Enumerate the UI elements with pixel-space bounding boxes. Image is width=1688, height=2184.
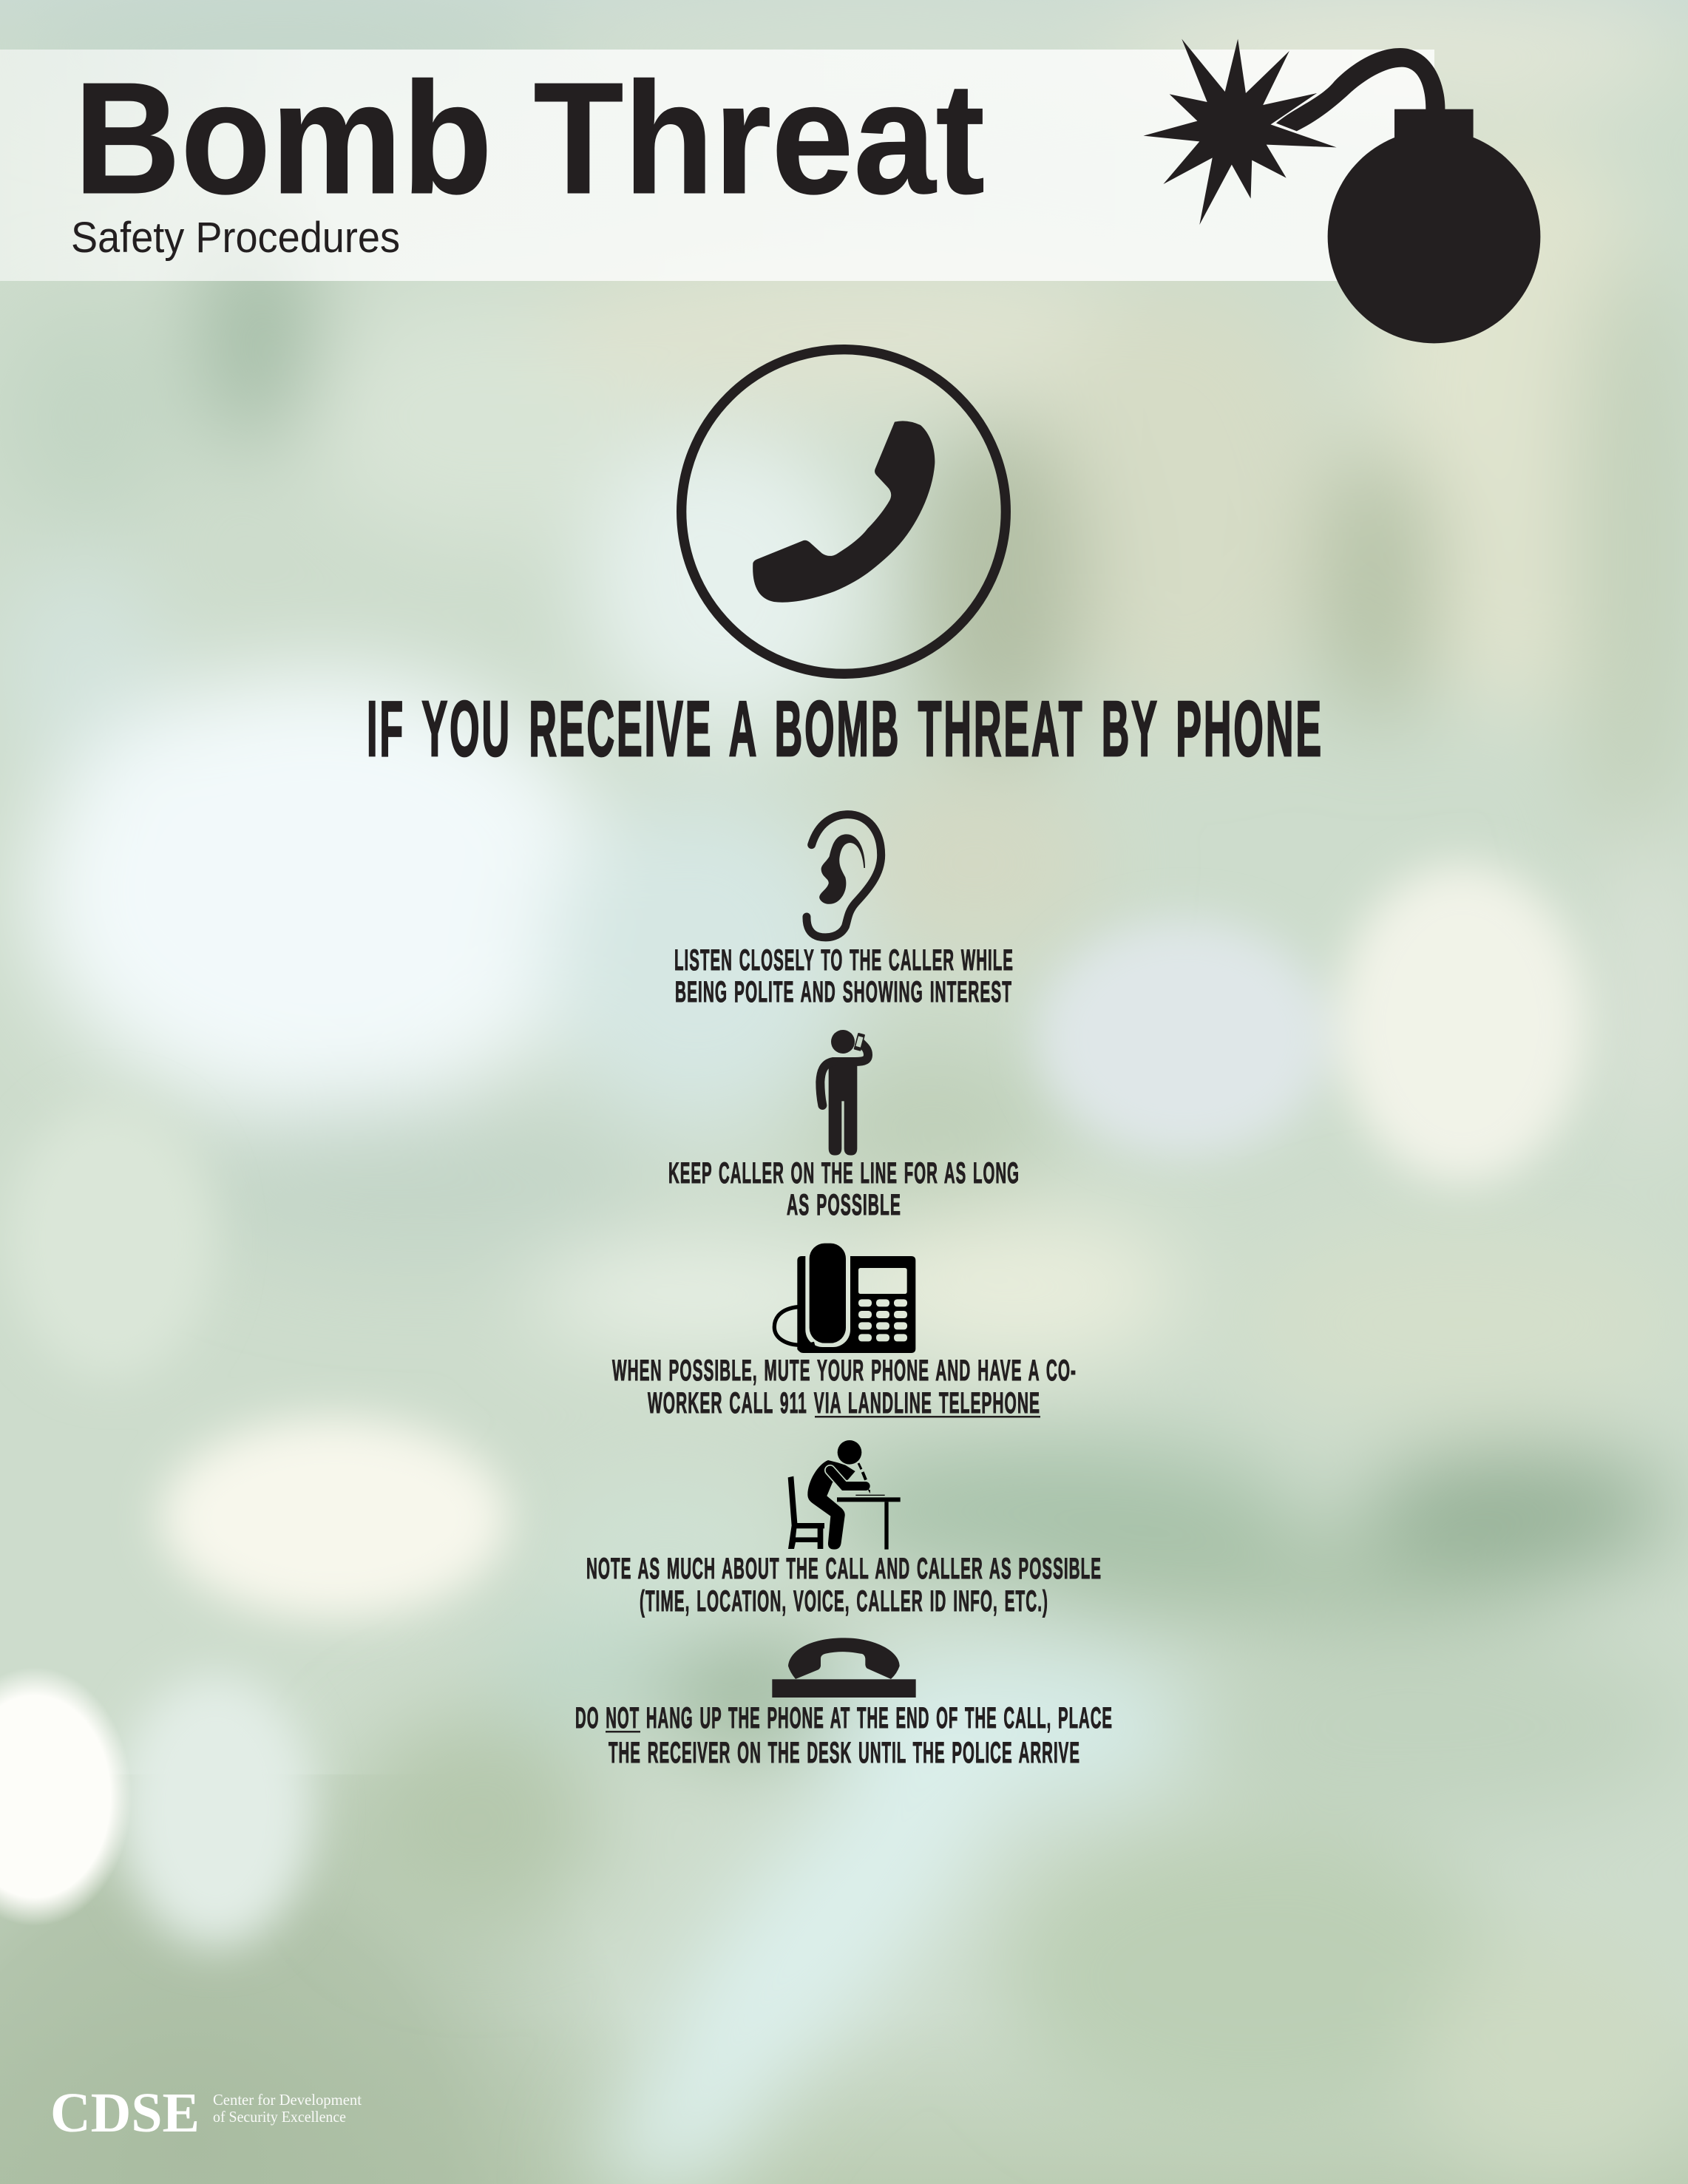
step 4: take notes <box>586 1440 1102 1618</box>
icon: handset on desk <box>772 1638 916 1698</box>
logo tagline: Center for Development <box>213 2091 362 2109</box>
step 5 text: DO NOT HANG UP THE PHONE AT THE END OF THE CALL, PLACE <box>575 1702 1113 1734</box>
step 1 text: BEING POLITE AND SHOWING INTEREST <box>675 976 1012 1008</box>
circle outline <box>682 350 1006 674</box>
logo tagline: of Security Excellence <box>213 2108 346 2126</box>
step 3 text <box>612 1354 1077 1420</box>
icon: person writing at desk <box>788 1440 901 1550</box>
logo wordmark: CDSE <box>50 2082 200 2144</box>
icon: desk telephone <box>774 1244 915 1353</box>
step 2: keep on line <box>668 1030 1020 1221</box>
handset <box>753 421 935 603</box>
step 5 text: THE RECEIVER ON THE DESK UNTIL THE POLICE ARRIVE <box>609 1737 1080 1769</box>
subtitle: Safety Procedures <box>71 214 400 262</box>
icon: person on phone <box>820 1030 868 1156</box>
step 1 text: LISTEN CLOSELY TO THE CALLER WHILE <box>674 944 1014 977</box>
logo tagline <box>213 2091 362 2126</box>
logo: CDSE <box>50 2082 362 2144</box>
step 4 text: NOTE AS MUCH ABOUT THE CALL AND CALLER AS POSSIBLE <box>586 1553 1102 1585</box>
icon: ear <box>807 815 881 937</box>
spark <box>1143 39 1337 225</box>
step 4 text: (TIME, LOCATION, VOICE, CALLER ID INFO, ETC.) <box>640 1585 1048 1618</box>
step 3: mute and call 911 <box>612 1244 1077 1420</box>
header band <box>0 50 1434 281</box>
bomb body <box>1328 130 1540 343</box>
step 5 text <box>575 1702 1113 1769</box>
step 1 text <box>674 944 1014 1008</box>
step 1: listen <box>674 815 1014 1008</box>
step 2 text <box>668 1157 1020 1221</box>
step 2 text: KEEP CALLER ON THE LINE FOR AS LONG <box>668 1157 1020 1190</box>
step 3 text: WORKER CALL 911 VIA LANDLINE TELEPHONE <box>648 1387 1040 1420</box>
fuse <box>1276 48 1445 131</box>
step 2 text: AS POSSIBLE <box>787 1189 901 1221</box>
step 5: do not hang up <box>575 1638 1113 1769</box>
icon: phone in circle <box>682 350 1006 674</box>
icon: bomb with fuse and spark <box>1143 39 1540 343</box>
step 3 text: WHEN POSSIBLE, MUTE YOUR PHONE AND HAVE A CO- <box>612 1354 1077 1387</box>
title: Bomb Threat <box>74 49 985 227</box>
bomb cap <box>1394 109 1474 141</box>
step 4 text <box>586 1553 1102 1618</box>
